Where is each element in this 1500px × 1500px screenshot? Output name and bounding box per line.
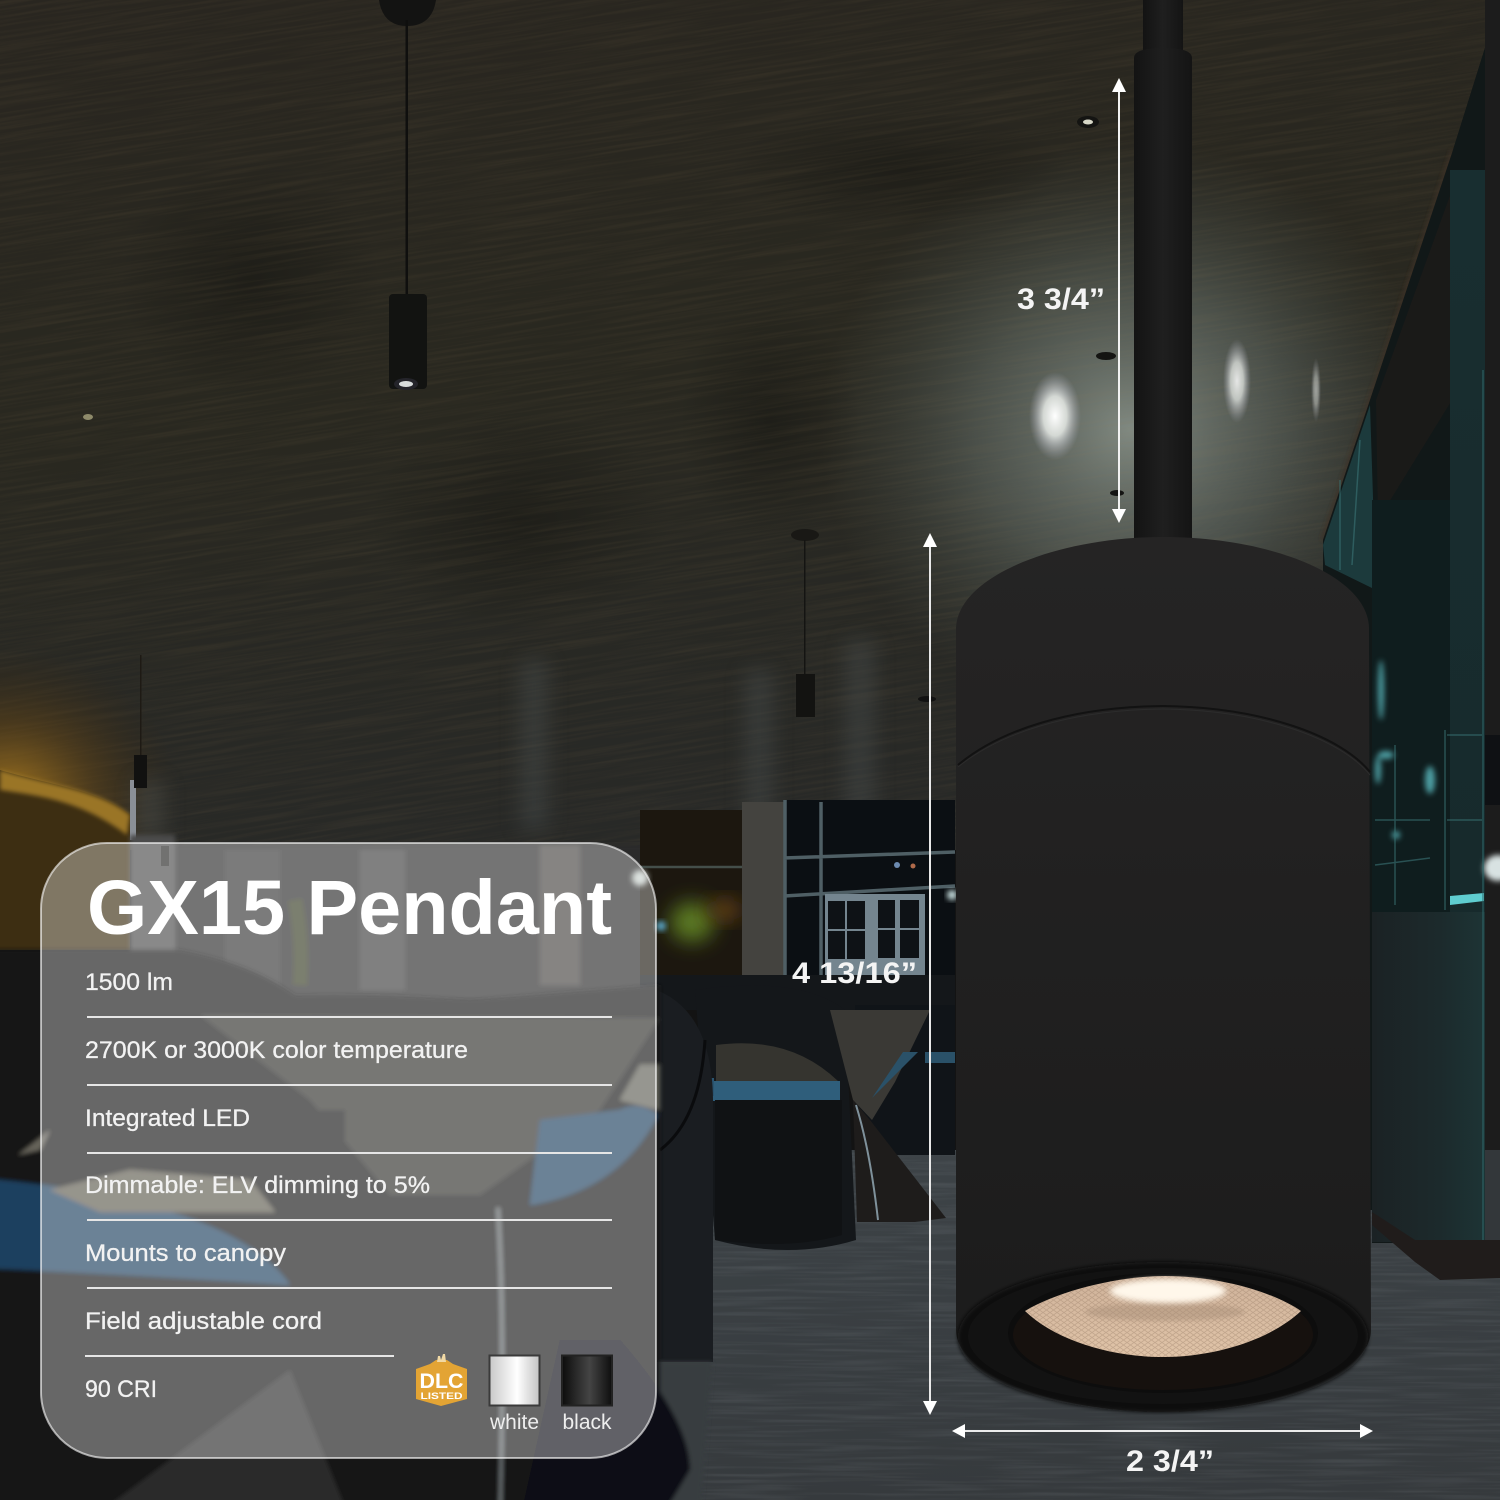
spec: CRI: 90 CRI: [85, 1376, 157, 1403]
icon: DLC listed badge: [416, 1354, 467, 1406]
dining furniture, behind panel: [0, 950, 712, 1500]
window area: [632, 800, 957, 990]
dimension arrow: diameter: [952, 1424, 1373, 1438]
icon: DLC listed badge: DLC: [420, 1370, 464, 1393]
dimension arrow: stem height: [1112, 78, 1126, 523]
ceiling edge at right: [1323, 150, 1453, 540]
spec: cord: Field adjustable cord: [85, 1308, 322, 1335]
heading: GX15 Pendant: [87, 865, 612, 951]
dimension label: 4 13/16: 4 13/16”: [792, 957, 917, 990]
ceiling: [0, 0, 1485, 850]
icon: DLC listed badge: LISTED: [420, 1391, 463, 1401]
dining furniture, right of panel: [640, 975, 955, 1362]
swatch: black finish: black: [562, 1411, 612, 1434]
gold woven feature wall: [0, 770, 136, 950]
swatch: white finish: white: [489, 1411, 539, 1434]
seam between canopy and body: [958, 706, 1370, 772]
spec: color temperature: 2700K or 3000K color temperature: [85, 1037, 468, 1064]
columns behind panel: [130, 835, 645, 1000]
product: GX15 pendant fixture: [956, 0, 1371, 1412]
dimension label: 3 3/4: 3 3/4”: [1017, 283, 1105, 316]
spec: integrated LED: Integrated LED: [85, 1105, 250, 1132]
dimension arrow: body height: [923, 533, 937, 1415]
cylinder body: [956, 537, 1371, 1412]
light aperture: [958, 1262, 1368, 1412]
swatch: white finish: [489, 1356, 540, 1434]
right glass wall: [1323, 0, 1500, 1280]
spec: mounting: Mounts to canopy: [85, 1240, 286, 1267]
spec: dimming: Dimmable: ELV dimming to 5%: [85, 1172, 430, 1199]
dimension label: 2 3/4: 2 3/4”: [1126, 1445, 1214, 1478]
floor: [640, 1150, 1500, 1500]
large pendant reflection spots on ceiling: [83, 116, 1321, 496]
swatch: black finish: [562, 1356, 612, 1434]
stem: [1134, 0, 1192, 545]
panel: product specifications: [41, 843, 656, 1458]
spec: lumens: 1500 lm: [85, 969, 173, 996]
background pendant lights: [134, 0, 936, 866]
